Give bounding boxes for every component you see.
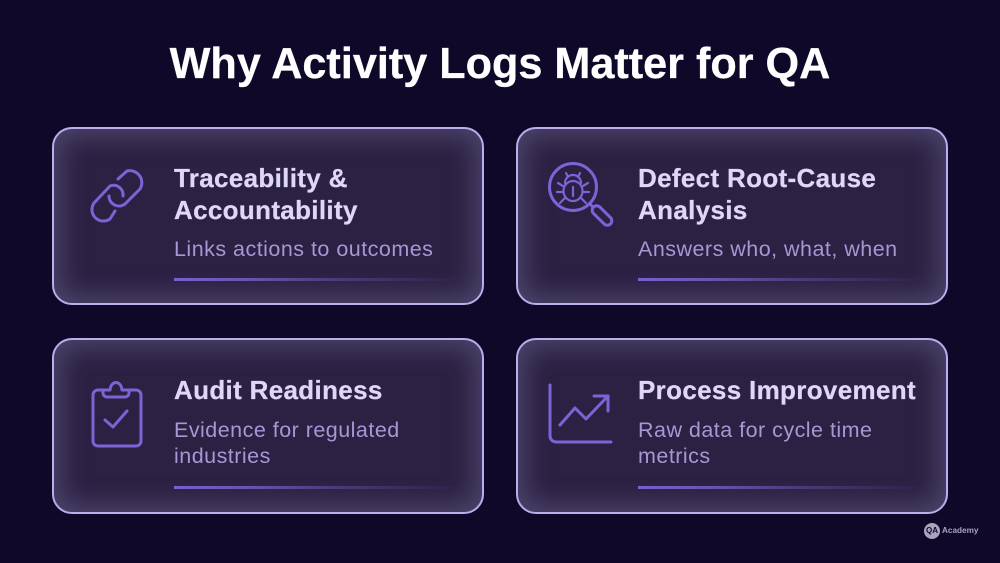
heading: traceability and accountability: Accountability (174, 195, 358, 225)
text: answers who, what, when: Answers who, what, when (638, 237, 898, 261)
text: raw data for cycle time metrics: metrics (638, 444, 711, 468)
accent line (174, 486, 459, 488)
panel: defect root-cause analysis (516, 127, 948, 305)
panel: process improvement (516, 338, 948, 514)
text: evidence for regulated industries: industries (174, 444, 271, 468)
text: evidence for regulated industries: Evidence for regulated (174, 418, 400, 442)
logo: QA Academy: QA (926, 526, 938, 535)
logo: QA Academy: Academy (942, 526, 978, 535)
heading: traceability and accountability (174, 163, 358, 225)
heading: process improvement: Process Improvement (638, 375, 916, 405)
panel: audit readiness (52, 338, 484, 514)
heading: traceability and accountability: Traceability & (174, 163, 348, 193)
icon: rising line chart (548, 384, 612, 444)
accent line (174, 278, 459, 280)
heading: audit readiness: Audit Readiness (174, 375, 383, 405)
heading: defect root-cause analysis: Defect Root-Cause (638, 163, 876, 193)
accent line (638, 278, 923, 280)
accent line (638, 486, 923, 488)
panel: traceability and accountability (52, 127, 484, 305)
heading: defect root-cause analysis: Analysis (638, 195, 748, 225)
icon: chain link (90, 169, 144, 222)
title: Why Activity Logs Matter for QA (170, 40, 830, 88)
text: raw data for cycle time metrics: Raw data for cycle time (638, 418, 872, 442)
heading: defect root-cause analysis (638, 163, 876, 225)
icon: clipboard with check (92, 381, 142, 448)
icon: magnifier with bug (548, 162, 614, 227)
text: links actions to outcomes: Links actions to outcomes (174, 237, 433, 261)
text: raw data for cycle time metrics (638, 418, 872, 468)
text: evidence for regulated industries (174, 418, 400, 468)
logo: QA Academy (924, 523, 978, 539)
